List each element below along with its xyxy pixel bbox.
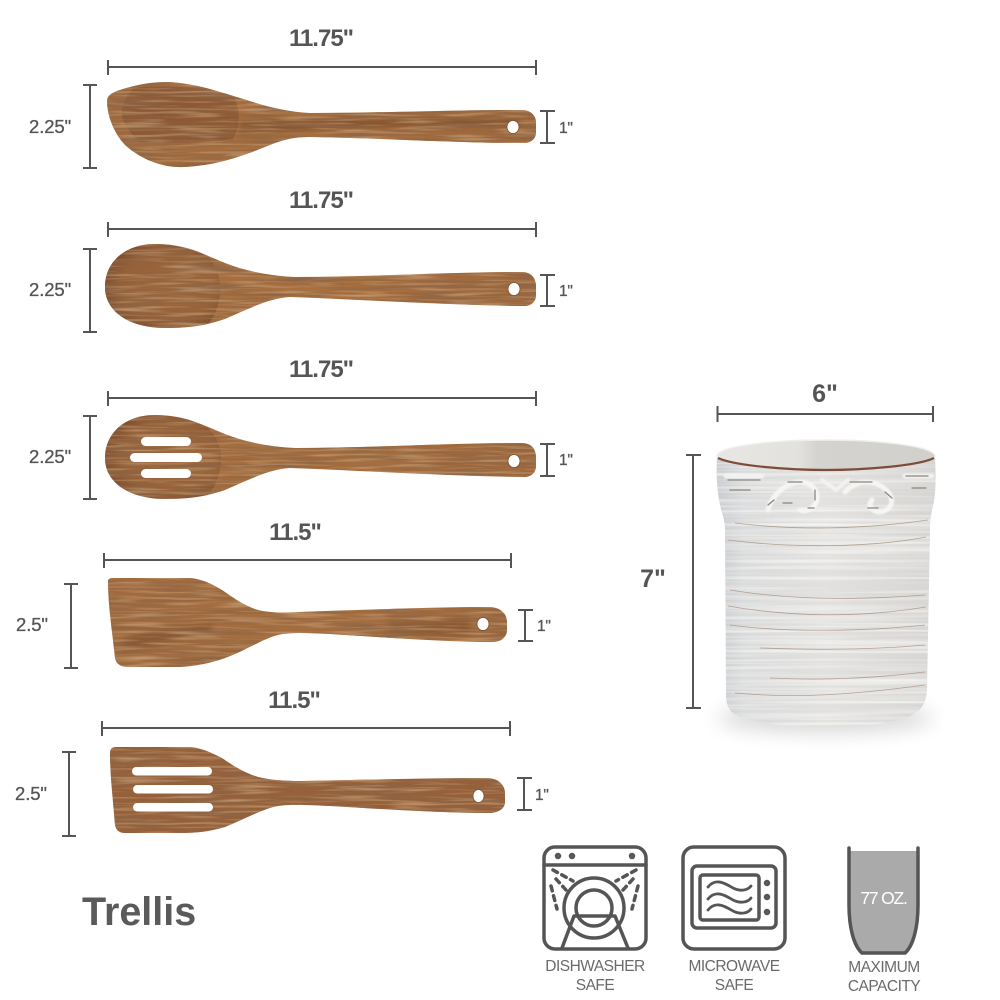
solid wooden turner: [108, 578, 507, 667]
handle dimension line: [518, 610, 533, 641]
slotted wooden spoon: [105, 415, 536, 499]
length label: 11.75": [289, 356, 353, 383]
length dimension line: [108, 222, 536, 237]
panel: slotted spoon with dimensions: [29, 356, 573, 499]
length label: 11.75": [289, 25, 353, 52]
panel: ceramic crock with dimensions: [640, 380, 936, 732]
handle label: 1": [559, 283, 573, 300]
length dimension line: [108, 60, 536, 75]
panel: slotted turner with dimensions: [15, 687, 549, 836]
panel: round spoon with dimensions: [29, 187, 573, 332]
hanging hole: [477, 618, 489, 630]
handle label: 1": [535, 787, 549, 804]
label: dishwasher safe: DISHWASHER: [545, 958, 645, 975]
length dimension line: [102, 721, 510, 736]
handle dimension line: [540, 275, 555, 306]
capacity value: 77 OZ.: [860, 888, 907, 908]
width label: 6": [812, 380, 838, 408]
icon: dishwasher safe: [544, 847, 646, 949]
distressed streak lines: [728, 520, 928, 696]
width label: 2.25": [29, 446, 71, 467]
hanging hole: [507, 120, 519, 134]
handle label: 1": [559, 120, 573, 137]
handle dimension line: [540, 444, 555, 476]
length label: 11.5": [268, 687, 320, 714]
slotted wooden turner: [110, 747, 505, 833]
width label: 2.25": [29, 116, 71, 137]
handle dimension line: [540, 111, 555, 143]
crock base shadow: [717, 704, 933, 732]
length dimension line: [108, 391, 536, 406]
brand name: Trellis: Trellis: [82, 890, 196, 934]
width label: 2.25": [29, 279, 71, 300]
label: maximum capacity: MAXIMUM: [848, 959, 920, 976]
width label: 2.5": [15, 783, 47, 804]
label: maximum capacity: CAPACITY: [848, 978, 920, 995]
slots: [130, 437, 202, 478]
handle label: 1": [559, 452, 573, 469]
handle dimension line: [517, 778, 532, 810]
height dimension line: [686, 455, 701, 708]
icon: microwave safe: [683, 847, 785, 949]
crock interior: [717, 440, 935, 472]
length dimension line: [104, 553, 511, 568]
label: microwave safe: SAFE: [715, 977, 753, 994]
length label: 11.5": [269, 519, 321, 546]
hanging hole: [508, 282, 520, 296]
panel: solid turner with dimensions: [16, 519, 551, 668]
panel: angled spoon with dimensions: [29, 25, 573, 168]
round wooden spoon: [105, 244, 536, 328]
embossed scroll pattern: [726, 476, 932, 512]
rim glaze line: [718, 458, 934, 470]
width dimension line: [64, 584, 78, 668]
label: microwave safe: MICROWAVE: [688, 958, 780, 975]
handle label: 1": [537, 618, 551, 635]
width dimension line: [83, 249, 97, 332]
length label: 11.75": [289, 187, 353, 214]
height label: 7": [640, 565, 666, 593]
crock body: [717, 458, 936, 727]
width dimension line: [83, 416, 97, 499]
icon: maximum capacity cup: [849, 848, 918, 953]
slots: [132, 767, 213, 812]
hanging hole: [473, 790, 484, 802]
width dimension line: [62, 752, 76, 836]
angled wooden spoon: [107, 82, 536, 167]
hanging hole: [508, 454, 520, 468]
width dimension line: [718, 406, 933, 422]
label: dishwasher safe: SAFE: [576, 977, 614, 994]
width dimension line: [83, 85, 97, 168]
width label: 2.5": [16, 614, 48, 635]
